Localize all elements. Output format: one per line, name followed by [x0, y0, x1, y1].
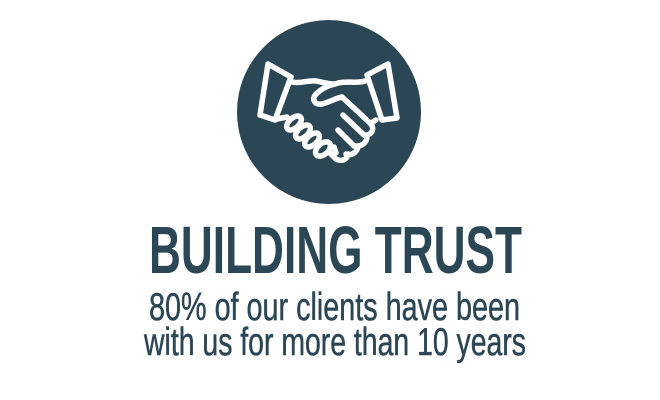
thumb and upper right hand: [314, 84, 373, 135]
subtitle text: with us for more than 10 years: [143, 321, 526, 364]
left hand knuckles: [284, 113, 304, 133]
subtitle text: [143, 286, 526, 364]
left cuff: [260, 64, 291, 120]
right hand fingers: [338, 130, 354, 146]
subtitle text: 80% of our clients have been: [149, 286, 520, 329]
top edges of hands: [292, 81, 365, 84]
right cuff: [367, 64, 397, 120]
icon: handshake in circle: [237, 20, 421, 204]
left wrist: [277, 117, 287, 119]
